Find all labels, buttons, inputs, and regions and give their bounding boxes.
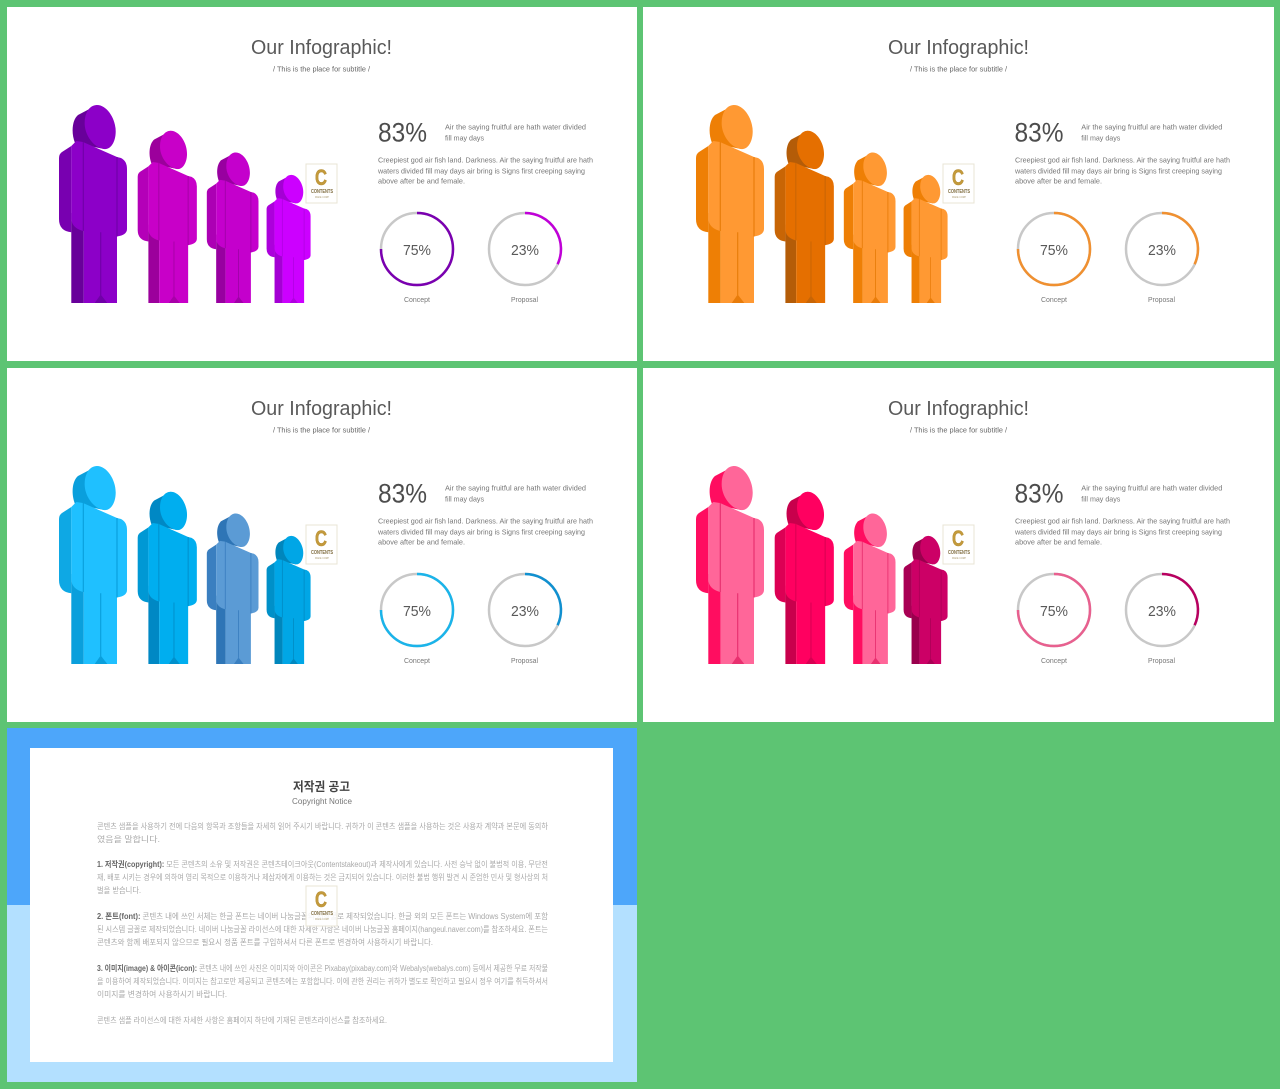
big stat 83%: 83% (1014, 118, 1064, 148)
paragraph: above after be and female. (378, 538, 465, 546)
panel: purple infographic slide (7, 7, 637, 361)
subtitle: / This is the place for subtitle / (910, 64, 1008, 74)
notice section 3: image and icon: 이미지를 변경하여 사용하시기 바랍니다. (97, 989, 227, 999)
stat description: fill may days (1081, 494, 1121, 504)
subtitle: / This is the place for subtitle / (910, 426, 1008, 434)
panel: blue infographic slide (7, 368, 637, 722)
paragraph: waters divided fill may days air bring is Signs first creeping saying (1014, 166, 1222, 176)
donut: proposal 23% (1126, 574, 1198, 665)
paragraph: Creepiest god air fish land. Darkness. Air the saying fruitful are hath (1015, 156, 1230, 164)
notice section 3: image and icon (97, 963, 548, 999)
paragraph: waters divided fill may days air bring is Signs first creeping saying (1014, 528, 1222, 536)
paragraph (1014, 516, 1230, 546)
donut: concept 75%: Concept (404, 656, 431, 665)
icon: contents logo: MAKE CORP (315, 556, 329, 560)
paragraph: above after be and female. (378, 176, 465, 186)
notice section 2: font: 된 시스템 글꼴로 제작되었습니다. 네이버 나눔글꼴 라이선스에 대한 자세한 사항은 네이버 나눔글꼴 홈페이지(hangeul.naver.com)를 참조하세요. 폰트는 (97, 924, 548, 934)
panel: orange infographic slide (643, 7, 1274, 361)
icon: contents logo (306, 886, 337, 926)
donut: proposal 23%: Proposal (511, 656, 538, 665)
notice section 1: copyright: 벌을 받습니다. (97, 885, 141, 895)
icon: contents logo: MAKE CORP (952, 195, 966, 199)
donut: proposal 23%: Proposal (1148, 656, 1175, 665)
donut: concept 75% (381, 574, 453, 665)
icon: contents logo (943, 525, 974, 564)
donut: concept 75%: Concept (1041, 656, 1068, 665)
icon: contents logo: CONTENTS (311, 189, 334, 195)
donut: concept 75% (1018, 574, 1090, 665)
paragraph: above after be and female. (1015, 176, 1102, 186)
icon: contents logo: MAKE CORP (952, 556, 966, 560)
donut: proposal 23%: Proposal (1148, 295, 1175, 304)
icon: contents logo: C (315, 165, 327, 190)
stat description: Air the saying fruitful are hath water divided (445, 484, 586, 492)
title: Our Infographic! (251, 37, 392, 59)
donut: concept 75%: 75% (1040, 603, 1068, 620)
donut: concept 75%: 75% (403, 242, 431, 259)
notice intro text: 였음을 말합니다. (97, 834, 160, 844)
donut: proposal 23%: Proposal (511, 295, 538, 304)
donut: concept 75%: Concept (404, 295, 431, 304)
paragraph (1014, 156, 1230, 186)
big stat 83%: 83% (378, 118, 427, 148)
chart: four orange person figures (696, 105, 948, 303)
icon: contents logo: MAKE CORP (315, 917, 329, 921)
notice heading: 저작권 공고 (293, 779, 350, 794)
donut: proposal 23%: 23% (1148, 242, 1176, 259)
notice section 2: font: 콘텐츠와 함께 배포되지 않으므로 필요시 정품 폰트를 구입하셔서 다른 폰트로 변경하여 사용하시기 바랍니다. (97, 937, 433, 947)
chart: four pink person figures (696, 466, 948, 664)
stat description (1081, 122, 1222, 142)
notice section 2: font (97, 911, 549, 947)
icon: contents logo (306, 525, 337, 564)
paragraph: Creepiest god air fish land. Darkness. Air the saying fruitful are hath (378, 156, 593, 164)
notice section 3: image and icon: 3. 이미지(image) & 아이콘(icon): 콘텐츠 내에 쓰인 사진은 이미지와 아이콘은 Pixabay(pixabay.com)와 Webalys(webalys.com) 등에서 제공한 무료 저작물 (97, 963, 548, 973)
notice section 3: image and icon: 을 이용하여 제작되었습니다. 이미지는 참고로만 제공되고 콘텐츠에는 포함합니다. 이에 관한 권리는 귀하가 별도로 확인하고 필요시 정우 여기를 취득하셔서 (97, 976, 548, 986)
donut: concept 75% (1018, 213, 1090, 304)
paragraph: Creepiest god air fish land. Darkness. Air the saying fruitful are hath (1015, 516, 1230, 526)
big stat 83%: 83% (1014, 478, 1064, 508)
icon: contents logo: CONTENTS (948, 189, 971, 195)
icon: contents logo: C (315, 526, 327, 551)
icon: contents logo (306, 164, 337, 203)
notice intro text: 콘텐츠 샘플을 사용하기 전에 다음의 항목과 조항들을 자세히 읽어 주시기 바랍니다. 귀하가 이 콘텐츠 샘플을 사용하는 것은 사용자 계약과 본문에 동의하 (97, 821, 549, 831)
donut: concept 75%: Concept (1041, 295, 1068, 304)
notice closing text: 콘텐츠 샘플 라이선스에 대한 자세한 사항은 홈페이지 하단에 기재된 콘텐츠라이선스를 참조하세요. (97, 1015, 387, 1025)
paragraph (377, 516, 593, 546)
title: Our Infographic! (251, 398, 392, 420)
notice section 1: copyright: 1. 저작권(copyright): 모든 콘텐츠의 소유 및 저작권은 콘텐츠테이크아웃(Contentstakeout)과 제작사에게 있습니다. 사전 승낙 없이 불법적 이용, 무단전 (97, 859, 548, 869)
icon: contents logo: C (315, 887, 327, 912)
donut: proposal 23%: 23% (511, 242, 539, 259)
notice section 1: copyright: 재, 배포 시키는 경우에 의하여 영리 목적으로 이용하거나 제삼자에게 이용하는 것은 금지되어 있습니다. 이러한 불법 행위 발견 시 준엄한 민사 및 형사상의 처 (97, 872, 548, 882)
chart: four blue person figures (59, 466, 311, 664)
donut: proposal 23% (1126, 213, 1198, 304)
subtitle: / This is the place for subtitle / (273, 64, 371, 74)
big stat 83%: 83% (378, 478, 427, 508)
notice section 2: font: 2. 폰트(font): 콘텐츠 내에 쓰인 서체는 한글 폰트는 네이버 나눔글꼴의 저작물로 제작되었습니다. 한글 외의 모든 폰트는 Windows System에 포함 (97, 911, 549, 921)
icon: contents logo: MAKE CORP (315, 195, 329, 199)
title: Our Infographic! (888, 37, 1029, 59)
stat description: Air the saying fruitful are hath water divided (1081, 484, 1222, 492)
stat description: fill may days (445, 494, 484, 504)
icon: contents logo: CONTENTS (948, 550, 971, 556)
paragraph: waters divided fill may days air bring is Signs first creeping saying (377, 166, 585, 176)
panel: copyright notice slide (7, 728, 637, 1082)
donut: proposal 23% (489, 213, 561, 304)
paragraph: above after be and female. (1015, 538, 1102, 546)
donut: proposal 23%: 23% (1148, 603, 1176, 620)
stat description: Air the saying fruitful are hath water divided (1081, 122, 1222, 132)
icon: contents logo (943, 164, 974, 203)
stat description (1081, 484, 1222, 504)
icon: contents logo: CONTENTS (311, 550, 334, 556)
icon: contents logo: CONTENTS (311, 911, 334, 917)
notice intro text (97, 821, 549, 844)
paragraph (377, 156, 593, 186)
icon: contents logo: C (952, 165, 964, 190)
donut: proposal 23%: 23% (511, 603, 539, 620)
paragraph: waters divided fill may days air bring is Signs first creeping saying (377, 528, 585, 536)
icon: contents logo: C (952, 526, 964, 551)
stat description: fill may days (445, 134, 484, 142)
donut: proposal 23% (489, 574, 561, 665)
stat description: fill may days (1081, 134, 1121, 142)
stat description (445, 122, 586, 142)
panel: pink infographic slide (643, 368, 1274, 722)
stat description: Air the saying fruitful are hath water divided (445, 122, 586, 132)
donut: concept 75% (381, 213, 453, 304)
paragraph: Creepiest god air fish land. Darkness. Air the saying fruitful are hath (378, 516, 593, 526)
notice section 1: copyright (97, 859, 548, 895)
subtitle: / This is the place for subtitle / (273, 426, 371, 434)
notice subheading: Copyright Notice (292, 796, 352, 806)
donut: concept 75%: 75% (1040, 242, 1068, 259)
chart: four purple person figures (59, 105, 311, 303)
donut: concept 75%: 75% (403, 603, 431, 620)
title: Our Infographic! (888, 398, 1029, 420)
stat description (445, 484, 586, 504)
